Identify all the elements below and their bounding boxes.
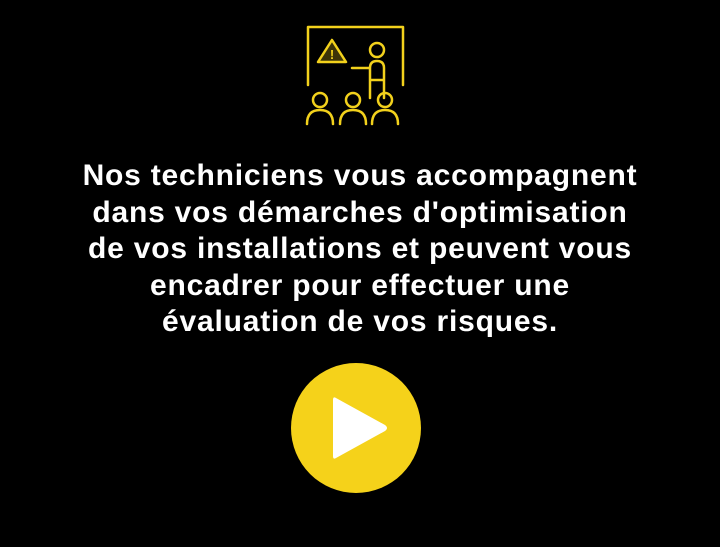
play button: [291, 363, 421, 493]
text block: encadrer pour effectuer une: [150, 268, 570, 302]
text block: évaluation de vos risques.: [162, 305, 558, 338]
text block: dans vos démarches d'optimisation: [92, 196, 628, 228]
text block: de vos installations et peuvent vous: [88, 232, 632, 265]
text block: Nos techniciens vous accompagnent: [83, 159, 637, 192]
text block: [83, 159, 637, 338]
icon: training presentation: [306, 26, 404, 126]
icon: training presentation: !: [330, 47, 334, 62]
